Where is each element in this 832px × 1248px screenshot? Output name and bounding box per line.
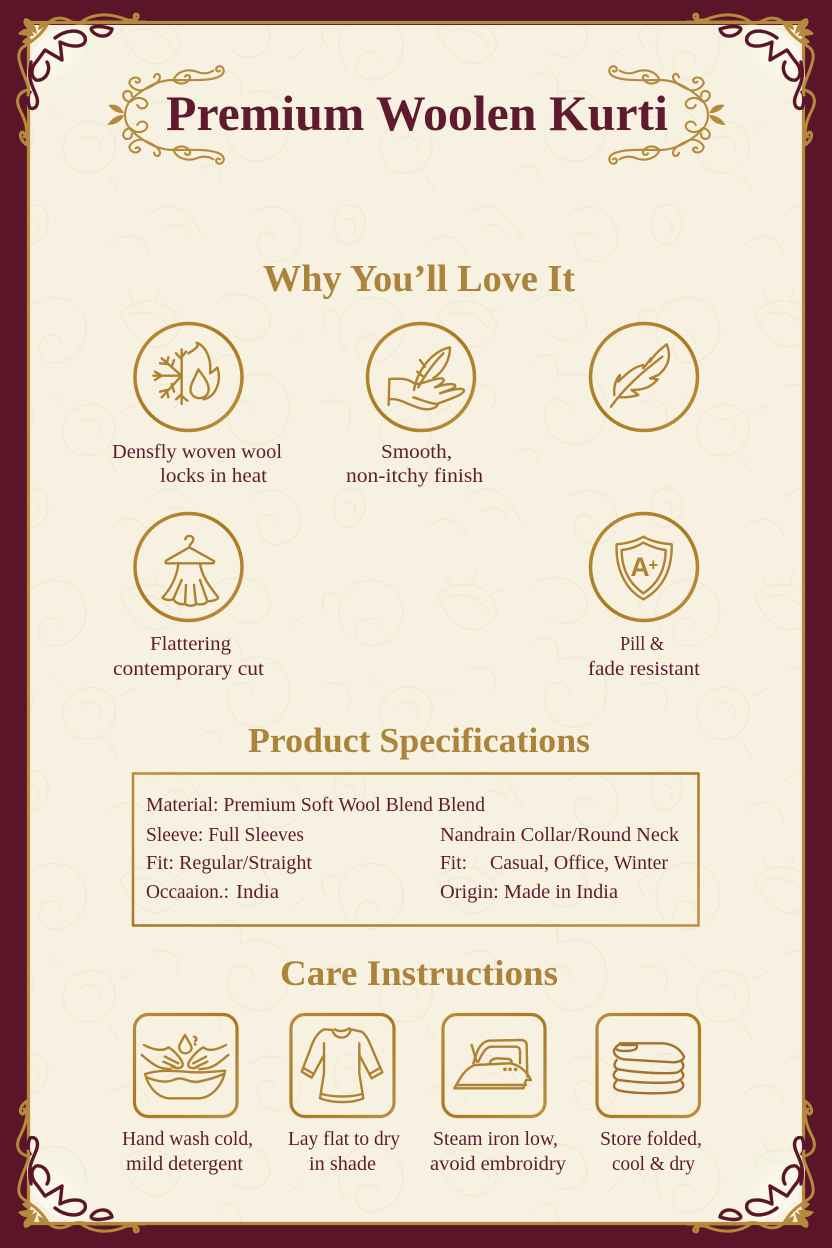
corner ornament: top right (687, 14, 814, 145)
label: non-itchy finish (346, 466, 483, 487)
feature: cut (113, 514, 265, 680)
spec text right column: Fit: (440, 853, 467, 874)
icon: iron (443, 1014, 545, 1116)
feature: durability (588, 514, 701, 680)
label (430, 1129, 566, 1175)
spec text left column: Sleeve: Full Sleeves (146, 825, 304, 846)
title ornament: left (107, 66, 224, 164)
label (588, 634, 701, 680)
feature: warmth (112, 324, 283, 487)
heading: why you'll love it: Why You’ll Love It (263, 258, 575, 300)
icon: snowflake and flame (135, 324, 242, 430)
label: contemporary cut (113, 659, 265, 680)
heading: product specifications: Product Specifications (248, 721, 590, 760)
spec text left column: Fit: Regular/Straight (146, 853, 313, 874)
icon: hand with feather (368, 324, 474, 430)
title: Premium Woolen Kurti (166, 85, 668, 141)
label: Lay flat to dry (288, 1129, 400, 1150)
corner ornament: bottom left (18, 1101, 145, 1232)
label: avoid embroidry (430, 1154, 566, 1175)
title ornament: right (609, 66, 726, 164)
label (112, 442, 283, 487)
icon: A+ shield (590, 514, 698, 620)
icon: folded stack (597, 1014, 700, 1116)
care: lay flat (288, 1014, 400, 1175)
spec text left column: Material: Premium Soft Wool Blend Blend (146, 795, 485, 816)
label: locks in heat (160, 466, 268, 487)
label: cool & dry (612, 1154, 695, 1175)
care: steam iron (430, 1014, 566, 1175)
label: Store folded, (600, 1129, 702, 1150)
label (113, 634, 265, 680)
label: Steam iron low, (433, 1129, 558, 1150)
label: Pill & (620, 634, 664, 655)
spec text left column: Occaaion.: (146, 882, 229, 903)
label: in shade (309, 1154, 376, 1175)
corner ornament: top left (18, 14, 145, 145)
panel: specifications (133, 774, 698, 926)
icon: dress on hanger (135, 514, 242, 620)
spec text right column: Nandrain Collar/Round Neck (440, 825, 679, 846)
label: Densfly woven wool (112, 442, 283, 463)
spec text right column (440, 825, 679, 903)
icon: hands over basin (134, 1014, 237, 1116)
icon: A+ shield: A (630, 552, 650, 582)
label: Flattering (150, 634, 231, 655)
label: mild detergent (126, 1154, 244, 1175)
corner ornament: bottom right (687, 1101, 814, 1232)
spec text right column: Origin: Made in India (440, 882, 618, 903)
label: fade resistant (588, 659, 701, 680)
label (288, 1129, 400, 1175)
label: Smooth, (381, 442, 452, 463)
label (600, 1129, 702, 1175)
icon: A+ shield: + (648, 556, 658, 575)
feature: lightweight (590, 324, 698, 430)
label (346, 442, 483, 487)
feature: softness (346, 324, 483, 487)
care: hand wash (122, 1014, 253, 1175)
icon: kurti (291, 1014, 394, 1116)
care: store folded (597, 1014, 702, 1175)
heading: care instructions: Care Instructions (280, 953, 558, 993)
spec text left column: India (236, 882, 279, 903)
label (122, 1129, 253, 1175)
label: Hand wash cold, (122, 1129, 253, 1150)
icon: feather (611, 344, 669, 407)
spec text right column: Casual, Office, Winter (490, 853, 669, 874)
spec text left column (146, 795, 485, 903)
